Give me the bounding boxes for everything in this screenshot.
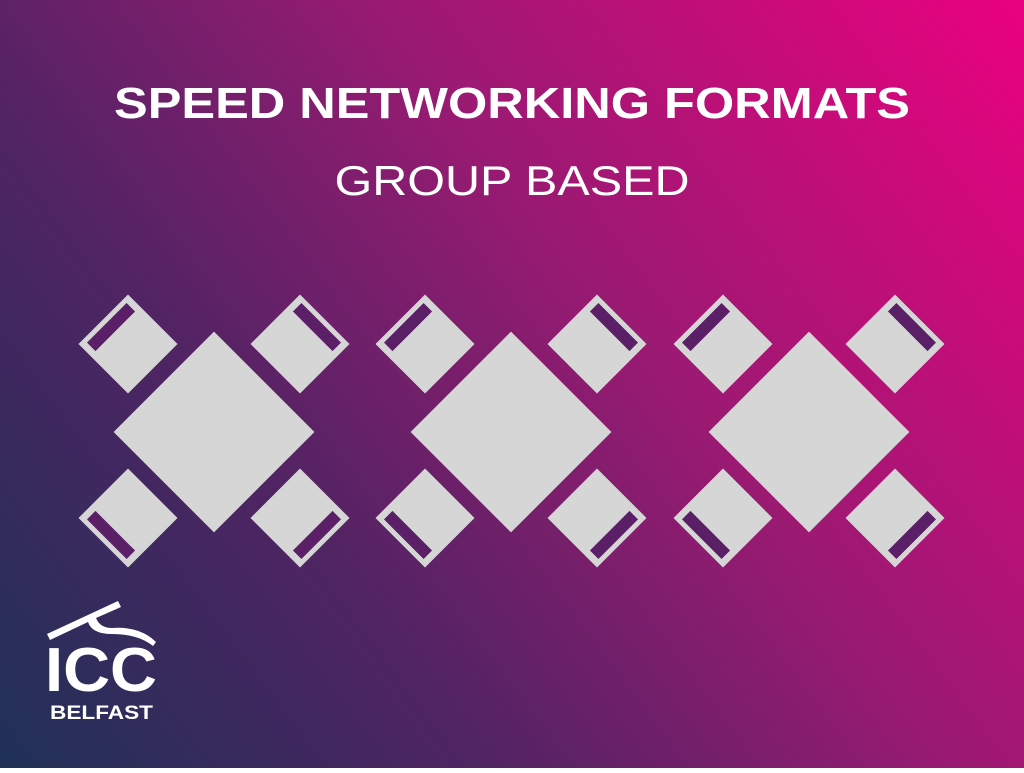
title: SPEED NETWORKING FORMATS [114,79,910,128]
table group 2 [376,295,646,567]
logo: ICC Belfast: ICC [45,636,157,705]
logo: ICC Belfast: BELFAST [50,703,153,724]
subtitle: GROUP BASED [334,157,690,204]
table group 1 [79,295,349,567]
logo: ICC Belfast [45,601,157,724]
table group 3 [674,295,944,567]
